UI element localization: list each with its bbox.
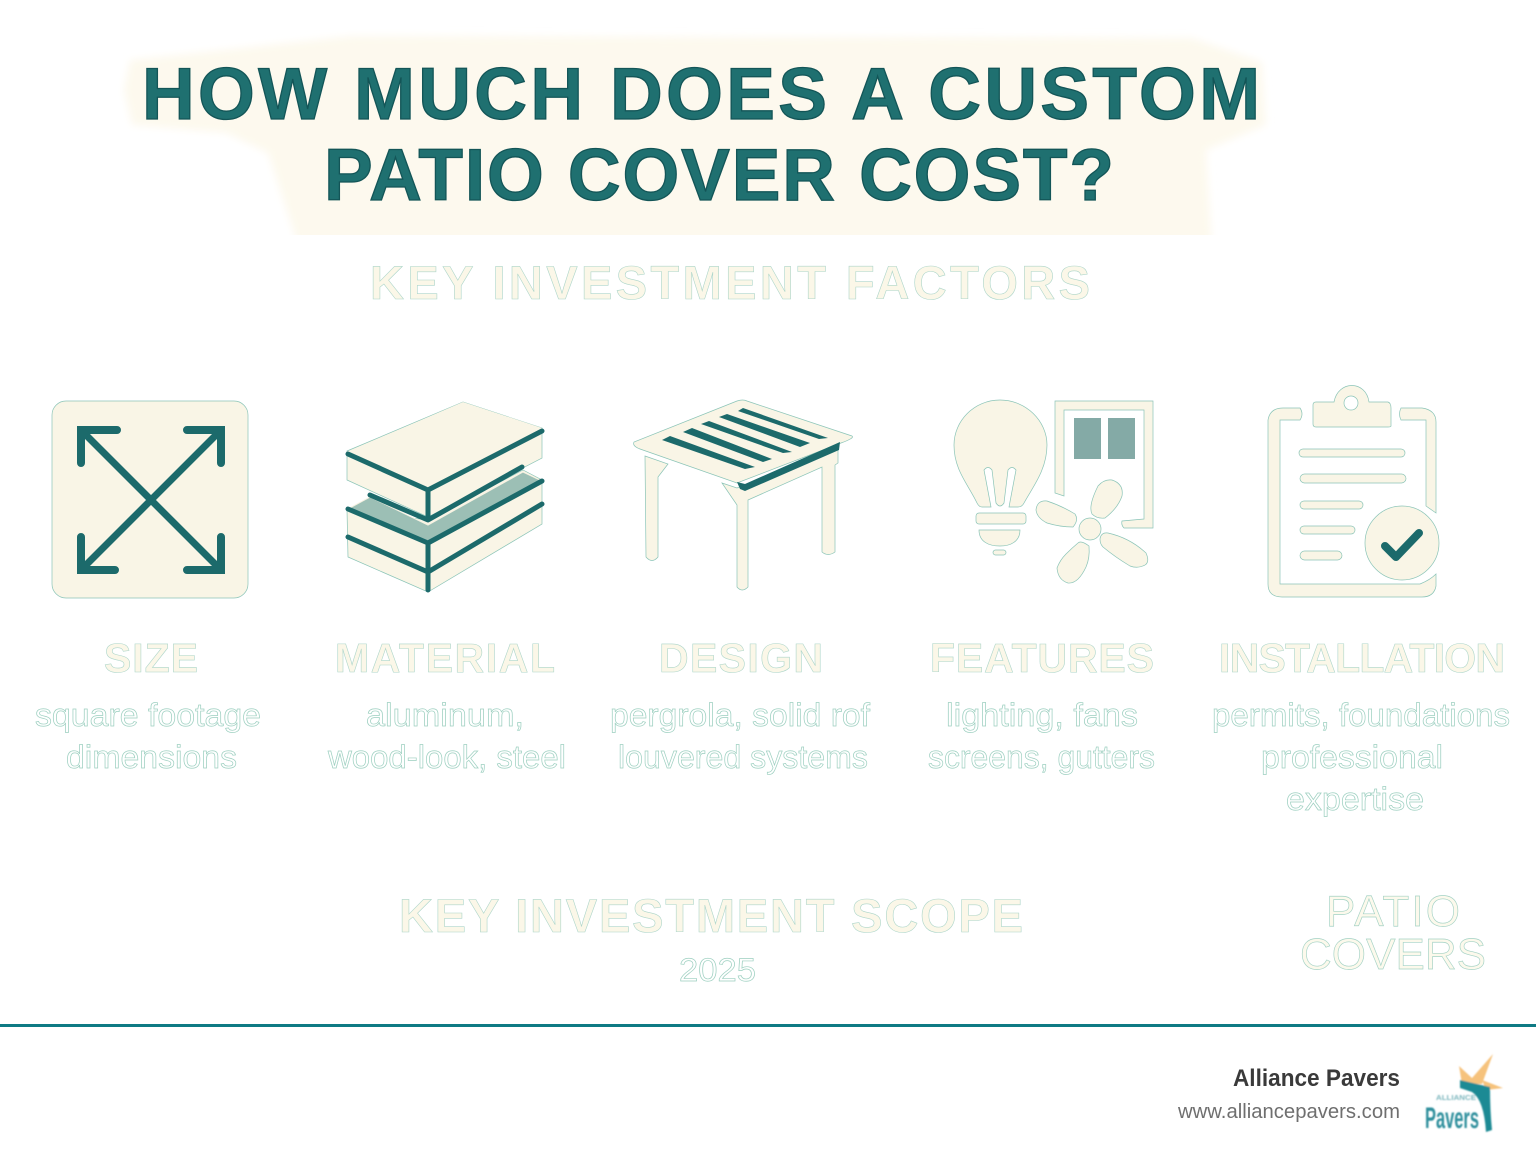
factor: design: DESIGN (659, 635, 823, 681)
logo: ALLIANCE (1436, 1095, 1476, 1102)
factor: size: dimensions (66, 739, 237, 775)
factor: features: screens, gutters (928, 739, 1155, 775)
year: 2025 (679, 952, 756, 988)
factor: features: lighting, fans (946, 697, 1138, 733)
footer brand (1177, 1065, 1400, 1123)
title: PATIO COVER COST? (324, 135, 1114, 216)
icon: size (52, 401, 248, 598)
label: patio covers: PATIO (1326, 887, 1460, 936)
icon: features (954, 400, 1153, 583)
factor: size: SIZE (104, 635, 198, 681)
factor: installation (1212, 635, 1510, 817)
factor: design (610, 635, 870, 775)
factor: installation: permits, foundations (1212, 697, 1510, 733)
title: HOW MUCH DOES A CUSTOM (142, 54, 1260, 135)
footer brand: Alliance Pavers (1233, 1065, 1400, 1092)
factor: material (327, 635, 566, 775)
factor: material: aluminum, (366, 697, 524, 733)
factor: features: FEATURES (930, 635, 1154, 681)
footer rule (0, 1024, 1536, 1027)
logo (1425, 1054, 1503, 1135)
factor: features (928, 635, 1155, 775)
heading: key investment factors: KEY INVESTMENT FACTORS (370, 256, 1090, 309)
icon: design pergola (634, 400, 853, 590)
heading: key investment scope: KEY INVESTMENT SCOPE (399, 889, 1023, 942)
icon: material (347, 402, 542, 592)
factor: installation: expertise (1286, 781, 1424, 817)
factor: size (35, 635, 261, 775)
footer brand: www.alliancepavers.com (1177, 1101, 1400, 1123)
icon: installation clipboard (1268, 386, 1439, 597)
factor: design: louvered systems (618, 739, 868, 775)
title (142, 54, 1260, 216)
factor: material: wood-look, steel (327, 739, 566, 775)
label: patio covers: COVERS (1300, 930, 1486, 979)
title banner (124, 36, 1266, 245)
label: patio covers (1300, 887, 1486, 979)
factor: material: MATERIAL (335, 635, 555, 681)
logo: Pavers (1425, 1102, 1479, 1135)
factor: installation: professional (1261, 739, 1443, 775)
factor: installation: INSTALLATION (1219, 635, 1505, 681)
factor: size: square footage (35, 697, 261, 733)
factor: design: pergrola, solid rof (610, 697, 870, 733)
